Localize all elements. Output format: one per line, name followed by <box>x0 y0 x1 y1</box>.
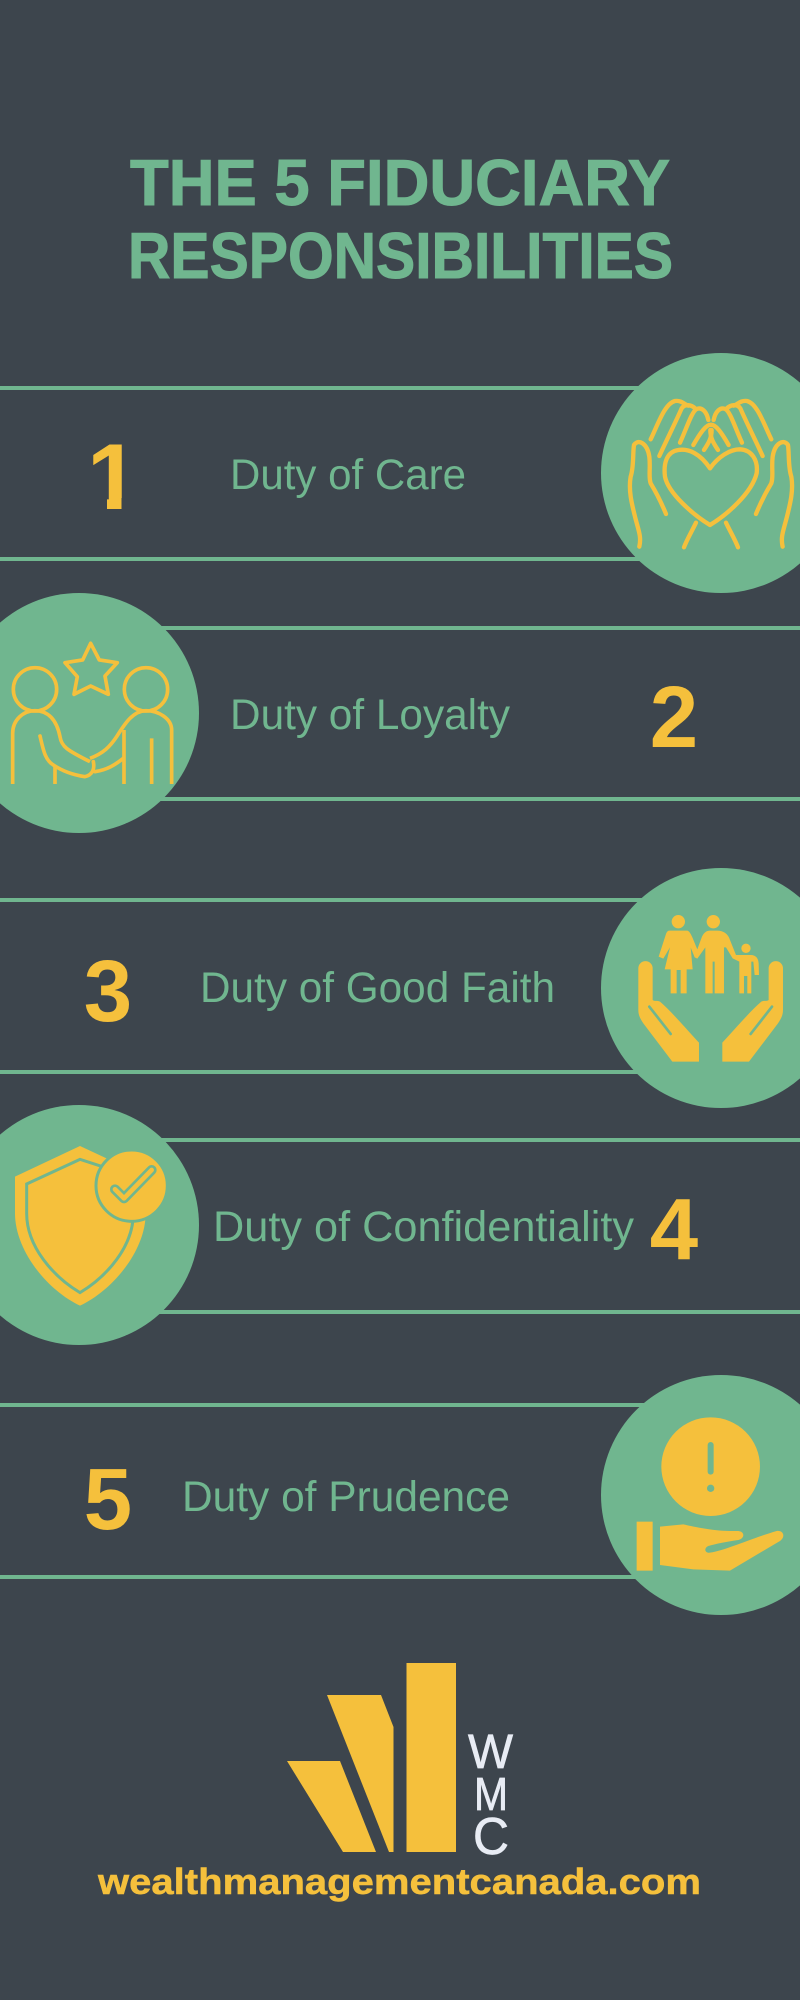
panel: duty of care <box>0 353 800 593</box>
number 1: 1 <box>87 424 139 529</box>
title <box>128 146 673 292</box>
number 4: 4 <box>650 1181 698 1278</box>
icon: hands holding family <box>601 868 800 1108</box>
panel: duty of good faith <box>0 868 800 1108</box>
logo letters <box>468 1726 514 1866</box>
label: duty of care: Duty of Care <box>230 451 466 499</box>
title: RESPONSIBILITIES <box>128 219 673 292</box>
icon: hands holding heart <box>601 353 800 593</box>
icon: handshake with star <box>0 593 199 833</box>
panel: duty of confidentiality <box>0 1105 800 1345</box>
icon: shield with check <box>0 1105 199 1345</box>
logo letters: M <box>474 1768 508 1820</box>
number 2: 2 <box>650 669 698 766</box>
logo: WMC bars <box>287 1663 514 1866</box>
icon: hand with alert coin <box>601 1375 800 1615</box>
label: duty of good faith: Duty of Good Faith <box>200 964 555 1012</box>
panel: duty of loyalty <box>0 593 800 833</box>
logo letters: W <box>468 1726 514 1779</box>
number 3: 3 <box>84 943 132 1040</box>
logo letters: C <box>473 1808 509 1866</box>
panel: duty of prudence <box>0 1375 800 1615</box>
number 5: 5 <box>84 1451 132 1548</box>
label: duty of prudence: Duty of Prudence <box>182 1473 510 1521</box>
title: THE 5 FIDUCIARY <box>130 146 670 219</box>
website url: wealthmanagementcanada.com <box>97 1861 701 1902</box>
label: duty of loyalty: Duty of Loyalty <box>230 691 510 739</box>
label: duty of confidentiality: Duty of Confidentiality <box>213 1203 635 1251</box>
